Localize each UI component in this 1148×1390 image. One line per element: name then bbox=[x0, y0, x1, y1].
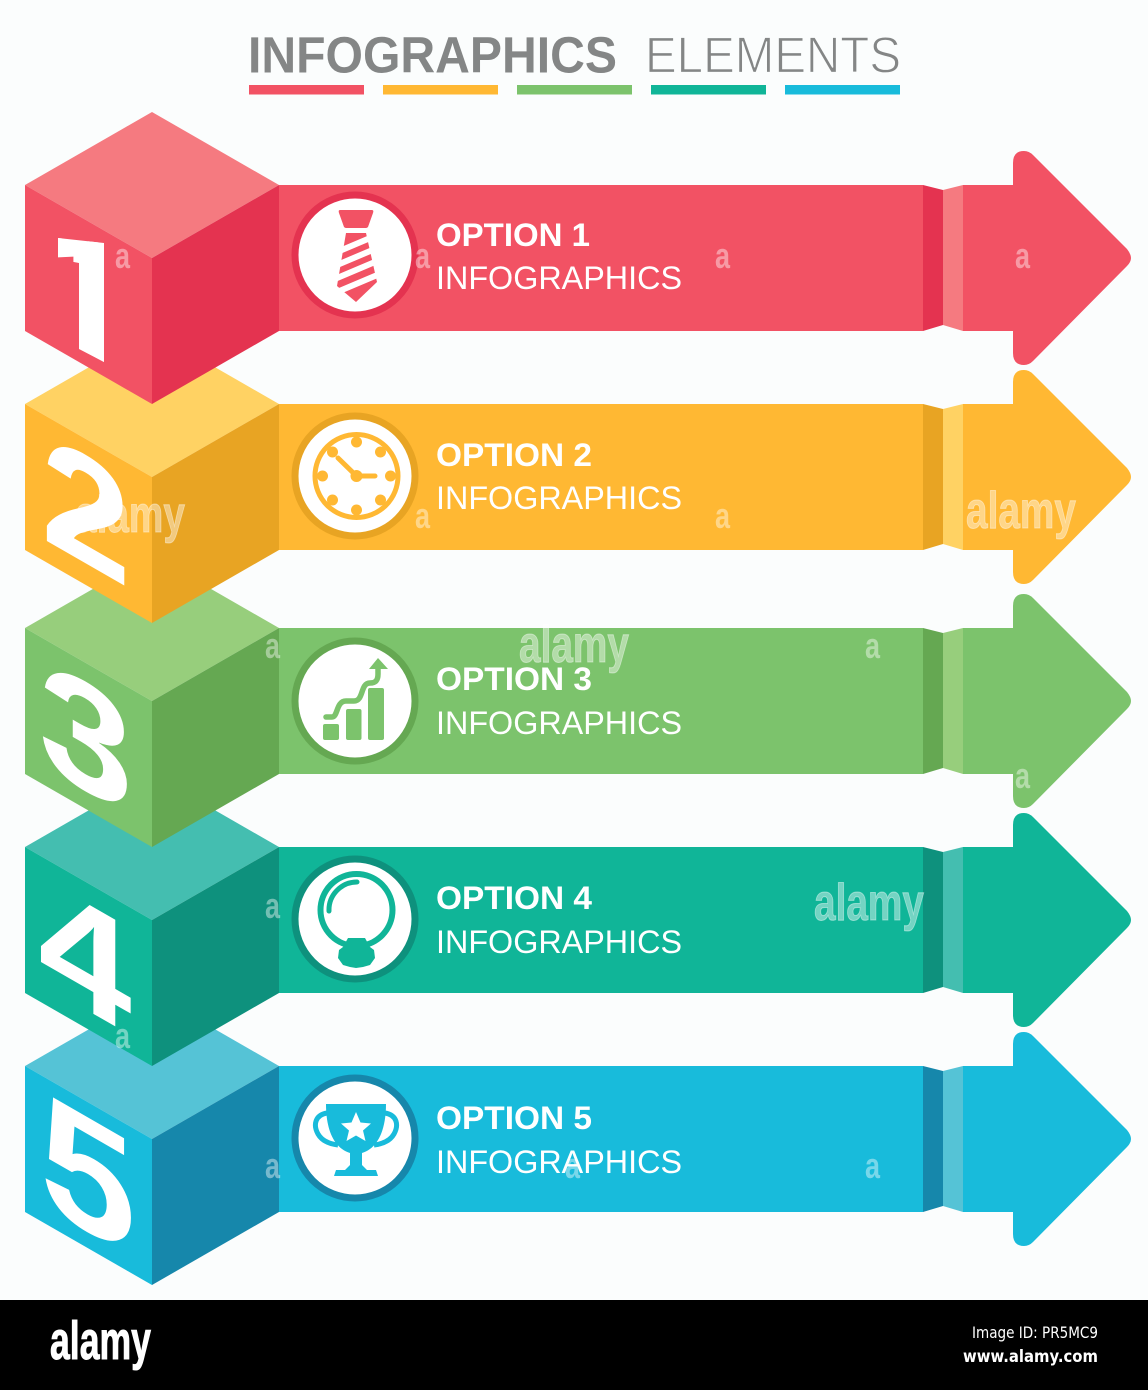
cube 1 bbox=[25, 112, 279, 404]
title: INFOGRAPHICS bbox=[248, 26, 617, 84]
icon: necktie bbox=[295, 195, 415, 315]
watermarks: alamy bbox=[814, 874, 924, 932]
footer logo: alamy bbox=[50, 1311, 151, 1371]
icon: clock bbox=[295, 416, 415, 536]
title bbox=[248, 26, 901, 84]
footer bar bbox=[0, 1300, 1148, 1390]
panel: option 4 bbox=[25, 774, 1131, 1069]
icon: trophy bbox=[295, 1078, 415, 1198]
watermarks: alamy bbox=[75, 486, 185, 544]
label 5: INFOGRAPHICS bbox=[436, 1144, 682, 1180]
label 1: OPTION 1 bbox=[436, 217, 590, 253]
cube 2 bbox=[25, 331, 279, 623]
cube 4 bbox=[25, 774, 279, 1066]
label 3: INFOGRAPHICS bbox=[436, 705, 682, 741]
watermarks: a bbox=[115, 235, 131, 276]
watermarks: alamy bbox=[519, 616, 629, 674]
label 4: OPTION 4 bbox=[436, 880, 592, 916]
panel: option 1 bbox=[25, 112, 1131, 415]
image id: Image ID: PR5MC9 bbox=[972, 1323, 1098, 1342]
arrow 4 bbox=[279, 813, 1131, 1027]
watermarks: a bbox=[865, 625, 881, 666]
website: www.alamy.com bbox=[963, 1347, 1098, 1367]
watermarks: a bbox=[115, 1015, 131, 1056]
watermarks bbox=[75, 235, 1076, 1186]
watermarks: a bbox=[265, 625, 281, 666]
number 4: 4 bbox=[38, 843, 132, 1069]
label 4 bbox=[436, 880, 682, 960]
watermarks: a bbox=[265, 1145, 281, 1186]
label 1: INFOGRAPHICS bbox=[436, 260, 682, 296]
watermarks: a bbox=[415, 495, 431, 536]
arrow 5 bbox=[279, 1032, 1131, 1246]
number 5: 5 bbox=[40, 1054, 136, 1294]
watermarks: a bbox=[1015, 755, 1031, 796]
watermarks: a bbox=[715, 495, 731, 536]
arrow 2 bbox=[279, 370, 1131, 584]
watermarks: alamy bbox=[966, 482, 1076, 540]
watermarks: a bbox=[1015, 235, 1031, 276]
watermarks: a bbox=[565, 1145, 581, 1186]
panel: option 5 bbox=[25, 993, 1131, 1294]
label 3: OPTION 3 bbox=[436, 661, 592, 697]
icon: light bulb bbox=[295, 859, 415, 979]
label 2 bbox=[436, 437, 682, 516]
arrow 3 bbox=[279, 594, 1131, 808]
watermarks: a bbox=[265, 885, 281, 926]
panel: option 2 bbox=[25, 331, 1131, 623]
arrow 1 bbox=[279, 151, 1131, 365]
label 2: INFOGRAPHICS bbox=[436, 480, 682, 516]
cube 5 bbox=[25, 993, 279, 1285]
watermarks: a bbox=[715, 235, 731, 276]
label 5 bbox=[436, 1100, 682, 1180]
number 3: 3 bbox=[39, 624, 133, 850]
label 3 bbox=[436, 661, 682, 741]
number 1: 1 bbox=[39, 171, 133, 415]
title colour bars bbox=[249, 85, 900, 94]
label 2: OPTION 2 bbox=[436, 437, 592, 473]
label 1 bbox=[436, 217, 682, 296]
label 4: INFOGRAPHICS bbox=[436, 924, 682, 960]
icon: growth chart bbox=[295, 641, 415, 761]
number 2: 2 bbox=[42, 398, 130, 621]
cube 3 bbox=[25, 555, 279, 847]
watermarks: a bbox=[415, 235, 431, 276]
panel: option 3 bbox=[25, 555, 1131, 850]
label 5: OPTION 5 bbox=[436, 1100, 592, 1136]
title: ELEMENTS bbox=[645, 26, 901, 84]
watermarks: a bbox=[865, 1145, 881, 1186]
